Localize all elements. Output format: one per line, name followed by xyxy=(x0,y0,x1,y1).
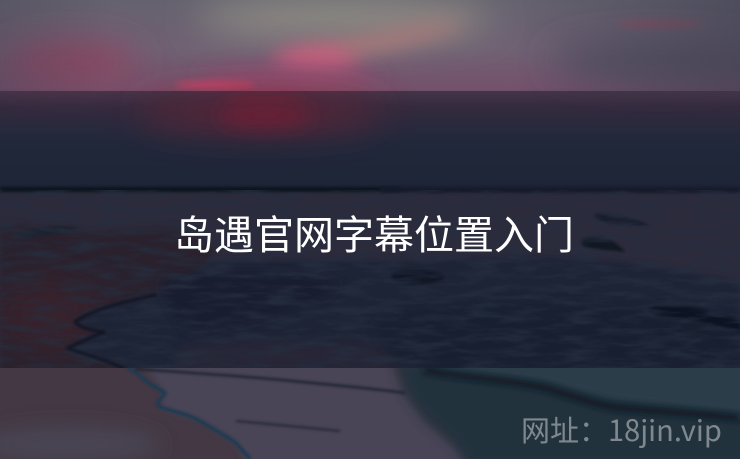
bottom band: sand, foam and shallow water xyxy=(0,360,740,459)
watermark: website address: 网址：18jin.vip xyxy=(521,408,722,450)
title: 岛遇官网字幕位置入门 xyxy=(174,203,574,261)
dark overlay band xyxy=(0,91,740,368)
waves and foam in the dark band xyxy=(0,190,740,368)
sky xyxy=(0,0,740,191)
sea and sand xyxy=(0,187,740,459)
